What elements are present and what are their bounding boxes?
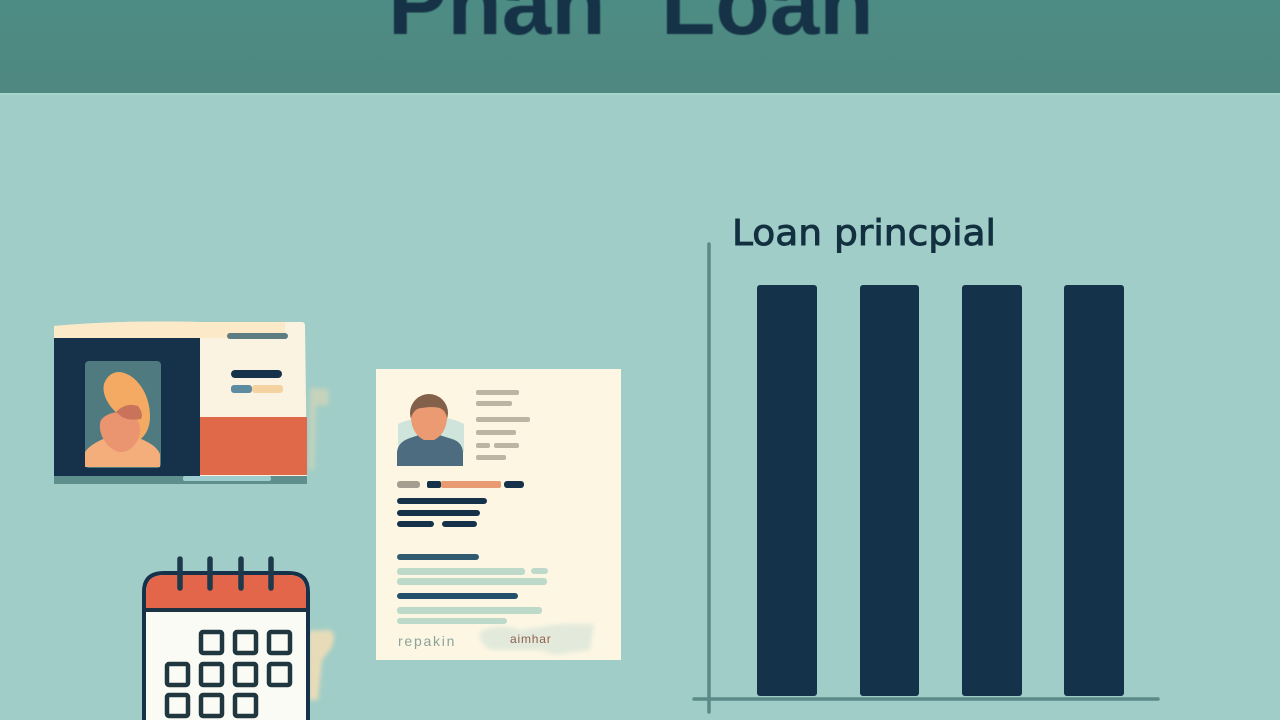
profile avatar xyxy=(397,394,464,466)
bars xyxy=(757,285,1124,696)
axes xyxy=(694,244,1158,712)
portrait photo xyxy=(85,361,161,468)
icon: resume document xyxy=(376,369,621,660)
icon: resume document: aimhar xyxy=(510,632,551,646)
binder rings xyxy=(180,559,271,588)
date cells xyxy=(167,632,290,716)
light text lines xyxy=(397,568,548,624)
bar chart xyxy=(694,213,1158,712)
signature smudge xyxy=(480,624,594,655)
footer text: repakin xyxy=(398,633,455,649)
icon: calendar xyxy=(144,559,334,720)
dark text lines xyxy=(397,498,518,599)
status bar xyxy=(397,481,524,488)
icon: ID card xyxy=(54,322,329,484)
chart label: Loan princpial xyxy=(732,213,996,254)
profile text lines xyxy=(476,390,530,460)
header band xyxy=(0,0,1280,95)
